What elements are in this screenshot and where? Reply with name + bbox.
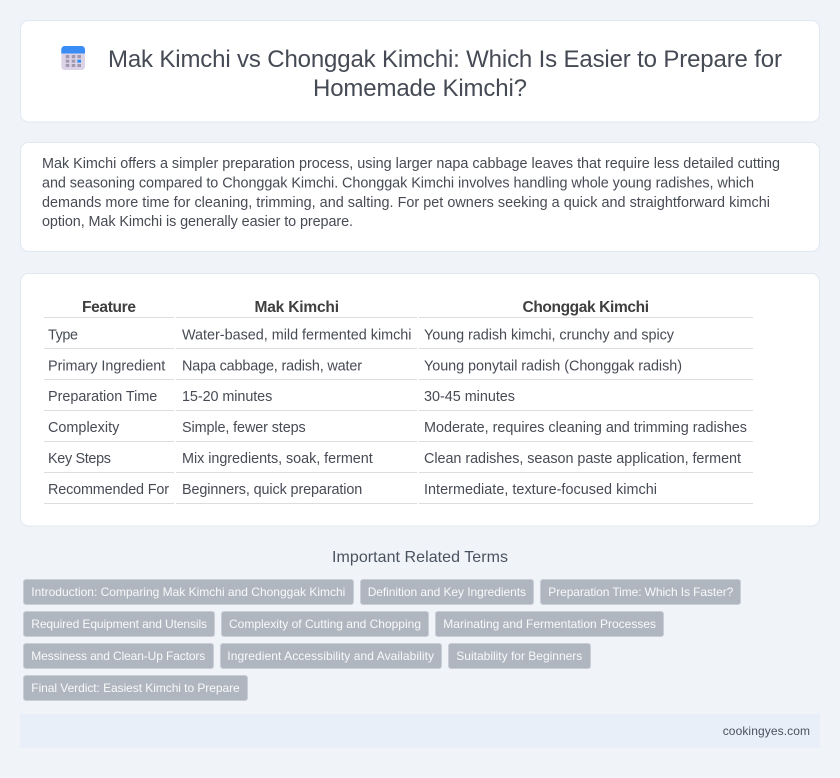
panel: title header	[20, 20, 820, 122]
tag: Ingredient Accessibility and Availability	[227, 649, 434, 663]
table row: Complexity: Moderate, requires cleaning and trimming radishes	[424, 420, 747, 436]
tag: Final Verdict: Easiest Kimchi to Prepare	[31, 681, 240, 695]
tag	[24, 612, 214, 636]
table header row	[82, 299, 649, 316]
tag	[24, 644, 214, 668]
table row: Complexity: Simple, fewer steps	[182, 420, 306, 436]
tag	[220, 644, 442, 668]
table row: Type: Young radish kimchi, crunchy and spicy	[424, 328, 675, 344]
tag list: related terms	[24, 580, 740, 700]
title	[108, 46, 782, 102]
table row: Preparation Time: Preparation Time	[48, 389, 157, 405]
text block: summary: demands more time for cleaning, trimming, and salting. For pet owners seeking a quick and straightforward kimchi	[42, 195, 770, 211]
table row: Key Steps	[48, 451, 741, 467]
title: Mak Kimchi vs Chonggak Kimchi: Which Is Easier to Prepare for	[108, 46, 782, 73]
footer: cookingyes.com	[723, 724, 810, 738]
table header row: Feature	[82, 299, 136, 316]
table row: Primary Ingredient: Young ponytail radish (Chonggak radish)	[424, 359, 682, 375]
text block: summary	[42, 156, 780, 230]
heading: related terms: Important Related Terms	[332, 549, 508, 566]
tag	[24, 580, 354, 604]
icon: calendar	[61, 46, 85, 70]
table row: Recommended For: Recommended For	[48, 482, 169, 498]
table header row: Chonggak Kimchi	[522, 299, 649, 316]
tag: Introduction: Comparing Mak Kimchi and Chonggak Kimchi	[31, 585, 345, 599]
tag: Definition and Key Ingredients	[368, 585, 526, 599]
table row: Type: Type	[48, 328, 78, 344]
tag	[24, 676, 248, 700]
tag	[448, 644, 590, 668]
tag: Required Equipment and Utensils	[31, 617, 207, 631]
table row: Type	[48, 328, 675, 344]
table row: Recommended For: Intermediate, texture-focused kimchi	[424, 482, 657, 498]
table header row: Mak Kimchi	[254, 299, 339, 316]
tag: Preparation Time: Which Is Faster?	[548, 585, 734, 599]
table row: Recommended For: Beginners, quick preparation	[182, 482, 362, 498]
table row: Primary Ingredient: Primary Ingredient	[48, 359, 165, 375]
tag	[360, 580, 534, 604]
tag: Complexity of Cutting and Chopping	[229, 617, 421, 631]
table row: Key Steps: Clean radishes, season paste application, ferment	[424, 451, 741, 467]
tag: Suitability for Beginners	[456, 649, 582, 663]
table row: Primary Ingredient: Napa cabbage, radish, water	[182, 359, 362, 375]
table row: Preparation Time: 15-20 minutes	[182, 389, 272, 405]
table row: Recommended For	[48, 482, 657, 498]
table row: Complexity: Complexity	[48, 420, 120, 436]
table row: Key Steps: Key Steps	[48, 451, 111, 467]
table row: Primary Ingredient	[48, 359, 682, 375]
text block: summary: and seasoning compared to Chonggak Kimchi. Chonggak Kimchi involves handling whole young radishes, which	[42, 176, 754, 192]
text block: summary: Mak Kimchi offers a simpler preparation process, using larger napa cabbage leaves that require less detailed cutting	[42, 156, 780, 172]
panel: summary text	[20, 142, 820, 252]
table row: Type: Water-based, mild fermented kimchi	[182, 328, 412, 344]
title: Homemade Kimchi?	[313, 75, 527, 102]
table row: Complexity	[48, 420, 747, 436]
tag	[222, 612, 428, 636]
tag	[436, 612, 664, 636]
panel: comparison table	[20, 274, 820, 526]
table row: Preparation Time	[48, 389, 515, 405]
footer	[20, 714, 820, 748]
text block: summary: option, Mak Kimchi is generally easier to prepare.	[42, 214, 353, 230]
tag: Marinating and Fermentation Processes	[443, 617, 656, 631]
table row: Key Steps: Mix ingredients, soak, ferment	[182, 451, 373, 467]
table row: Preparation Time: 30-45 minutes	[424, 389, 515, 405]
tag: Messiness and Clean-Up Factors	[31, 649, 205, 663]
tag	[540, 580, 740, 604]
